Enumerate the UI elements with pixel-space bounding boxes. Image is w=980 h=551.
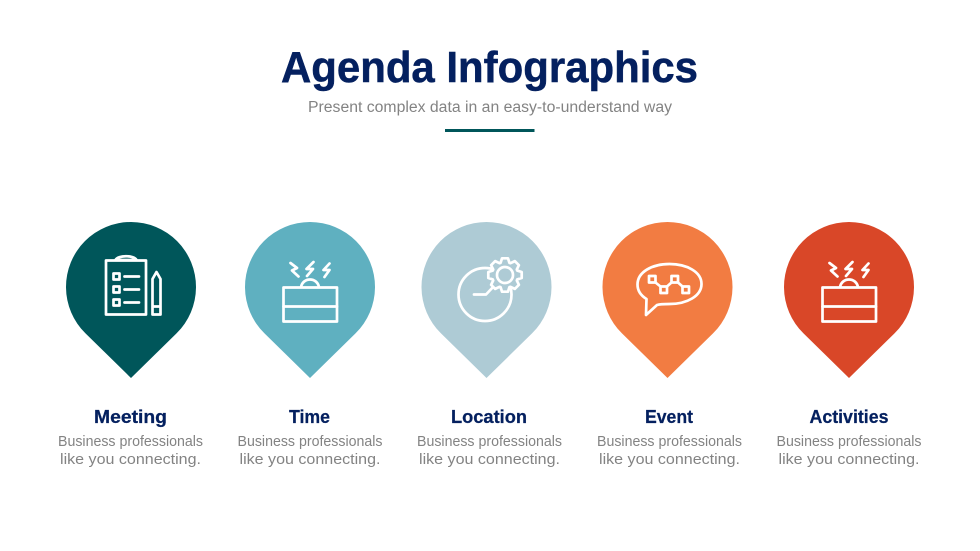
description: Event: like you connecting. (599, 451, 740, 468)
subtitle: Present complex data in an easy-to-understand way (308, 99, 672, 116)
icon: gear and clock (458, 258, 522, 321)
description: Location: Business professionals (417, 433, 562, 450)
icon: speech bubble (638, 264, 702, 315)
panel: location (417, 222, 562, 468)
heading: Time: Time (289, 407, 330, 427)
heading: Meeting: Meeting (94, 407, 167, 427)
description: Activities: Business professionals (776, 433, 922, 450)
description: Activities: like you connecting. (778, 451, 920, 468)
panel: meeting (58, 222, 203, 468)
icon: briefcase with sparks (822, 262, 876, 322)
pin: location (421, 222, 552, 378)
heading: Activities: Activities (810, 407, 888, 427)
description: Time: Business professionals (238, 433, 382, 450)
panel: event (597, 222, 742, 468)
title underline (445, 129, 534, 132)
description: Time: like you connecting. (240, 451, 380, 468)
icon: briefcase with sparks (284, 262, 337, 322)
pin: event (602, 222, 732, 378)
description: Meeting: Business professionals (58, 433, 203, 450)
pin: meeting (66, 222, 196, 378)
description: Location: like you connecting. (419, 451, 560, 468)
description: Meeting: like you connecting. (60, 451, 201, 468)
panel: time (238, 222, 382, 468)
description: Event: Business professionals (597, 433, 742, 450)
heading: Location: Location (451, 407, 527, 427)
pin: time (245, 222, 375, 378)
title: Agenda Infographics (281, 43, 698, 92)
pin: activities (784, 222, 914, 378)
heading: Event: Event (645, 407, 693, 427)
panel: activities (776, 222, 922, 468)
icon: clipboard and pencil (106, 256, 160, 314)
